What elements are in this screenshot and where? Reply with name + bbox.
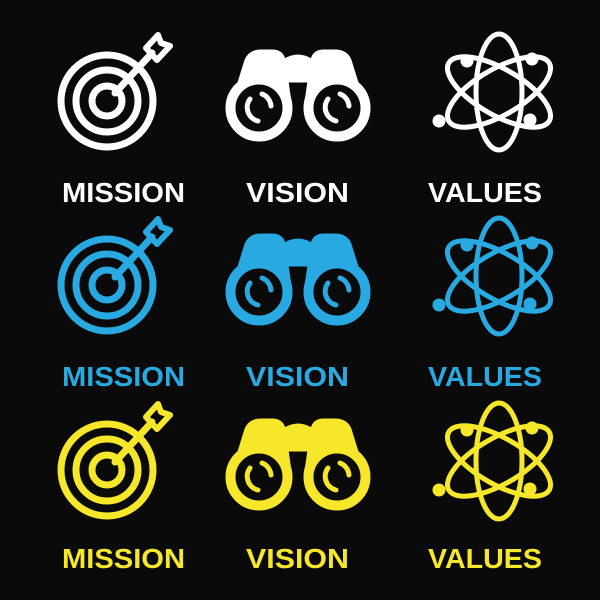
label: VALUES: VALUES bbox=[428, 177, 542, 208]
row: blue bbox=[61, 218, 561, 392]
label: VISION: VISION bbox=[246, 177, 349, 208]
row: yellow bbox=[61, 403, 561, 574]
icon: binoculars blue bbox=[226, 234, 370, 325]
label: VISION blue: VISION bbox=[246, 361, 349, 392]
label: MISSION yellow: MISSION bbox=[62, 543, 185, 574]
icon: atom white bbox=[433, 34, 561, 150]
label: VALUES blue: VALUES bbox=[428, 361, 542, 392]
row: white bbox=[61, 34, 561, 208]
label: MISSION blue: MISSION bbox=[62, 361, 185, 392]
label: VISION yellow: VISION bbox=[246, 543, 349, 574]
label: MISSION: MISSION bbox=[62, 177, 185, 208]
icon: binoculars white bbox=[226, 50, 370, 141]
icon: binoculars yellow bbox=[226, 419, 370, 510]
icon: target yellow bbox=[61, 404, 170, 516]
icon: target blue bbox=[61, 219, 170, 331]
icon: target white bbox=[61, 35, 170, 147]
label: VALUES yellow: VALUES bbox=[428, 543, 542, 574]
icon: atom yellow bbox=[433, 403, 561, 519]
icon: atom blue bbox=[433, 218, 561, 334]
